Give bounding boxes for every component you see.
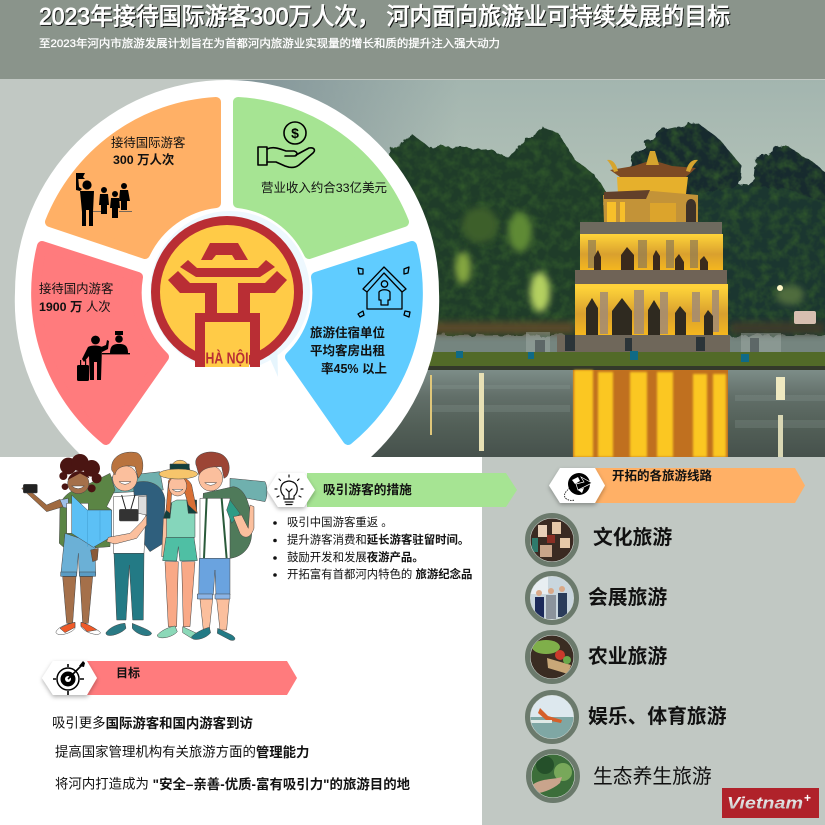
label: accommodation occupancy: 率45% 以上	[321, 361, 387, 376]
subtitle: 至2023年河内市旅游发展计划旨在为首都河内旅游业实现量的增长和质的提升注入强大动力	[39, 36, 500, 50]
bullet list: measures: 鼓励开发和发展夜游产品。	[287, 550, 424, 564]
white wheel background	[15, 80, 439, 457]
label: 农业旅游	[588, 645, 667, 668]
icon: light bulb	[267, 473, 315, 507]
label: 会展旅游	[588, 586, 667, 609]
label: accommodation occupancy: 平均客房出租	[310, 343, 386, 358]
value: 19 million visits: 1900 万 人次	[39, 300, 111, 314]
heading: 吸引游客的措施	[323, 482, 412, 497]
label: domestic visitors: 接待国内游客	[39, 281, 113, 296]
ribbon: goals	[42, 661, 297, 695]
thumbnail: kitesurfer	[530, 695, 574, 741]
panel: revenue	[238, 102, 404, 254]
thumbnail: vegetable crate	[530, 635, 574, 679]
thumbnail: masks	[530, 518, 574, 562]
text block: goals	[52, 714, 411, 792]
label: 文化旅游	[593, 526, 672, 549]
ribbon: measures to attract visitors	[267, 473, 517, 507]
logo: Vietnam+: Vietnam	[727, 794, 803, 812]
list item: eco and wellness tourism	[528, 752, 712, 800]
icon: plane around globe	[549, 468, 605, 503]
thumbnail: business people	[530, 576, 574, 620]
logo: Vietnam+	[722, 788, 819, 818]
thumbnail: hand with plant	[531, 754, 575, 798]
logo: Vietnam+: +	[804, 791, 811, 805]
panel: accommodation	[290, 246, 418, 440]
header band	[0, 0, 825, 79]
list item: cultural tourism	[528, 516, 672, 564]
label: 生态养生旅游	[593, 766, 712, 788]
bullet list: measures	[273, 515, 472, 581]
bullet list: measures: 提升游客消费和延长游客驻留时间。	[287, 532, 469, 546]
tourist 3	[157, 460, 198, 638]
label: 娱乐、体育旅游	[588, 705, 727, 728]
list item: MICE tourism	[528, 574, 667, 622]
emblem: Hanoi city logo	[150, 211, 310, 377]
label: revenue about 3.3 billion USD: 营业收入约合33亿美元	[261, 180, 387, 195]
tourist 4	[192, 452, 254, 640]
lake and reflection	[360, 351, 825, 457]
text block: goals: 吸引更多国际游客和国内游客到访	[52, 714, 253, 730]
panel: domestic visitors	[36, 246, 164, 440]
heading: 目标	[116, 665, 140, 680]
label: international visitors: 接待国际游客	[111, 135, 185, 150]
title: 2023年接待国际游客300万人次， 河内面向旅游业可持续发展的目标	[39, 4, 730, 30]
list item: entertainment and sports tourism	[528, 692, 727, 742]
text block: goals: 将河内打造成为 "安全–亲善-优质-富有吸引力"的旅游目的地	[55, 776, 411, 792]
bullet list: measures: 开拓富有首都河内特色的 旅游纪念品	[287, 567, 472, 581]
photo: Turtle Tower on Hoan Kiem lake at dusk	[230, 80, 825, 457]
tourist 4 bedroll and backpack	[200, 478, 267, 558]
illustration: group of four tourists	[22, 452, 267, 640]
heading: 开拓的各旅游线路	[612, 468, 713, 483]
logo caption: HÀ NỘI	[206, 348, 248, 368]
value: 3 million visits: 300 万人次	[113, 152, 175, 167]
icon: target with arrow	[42, 661, 97, 695]
bullet list: measures: 吸引中国游客重返 。	[287, 515, 393, 529]
ribbon: tourism routes	[549, 468, 805, 503]
label: accommodation occupancy: 旅游住宿单位	[310, 325, 385, 340]
tourist 2	[106, 452, 165, 636]
icon: person at home	[358, 267, 410, 317]
panel: international visitors	[50, 102, 216, 254]
icon: traveller at reception	[77, 331, 130, 381]
icon: hand holding money: $	[291, 125, 299, 141]
text block: goals: 提高国家管理机构有关旅游方面的管理能力	[55, 744, 309, 760]
tourist 1	[22, 454, 163, 635]
icon: tour guide with group	[76, 173, 132, 226]
label: accommodation occupancy	[310, 325, 387, 376]
icon: hand holding money	[258, 122, 314, 167]
tower	[526, 151, 781, 352]
list item: agricultural tourism	[528, 632, 667, 682]
